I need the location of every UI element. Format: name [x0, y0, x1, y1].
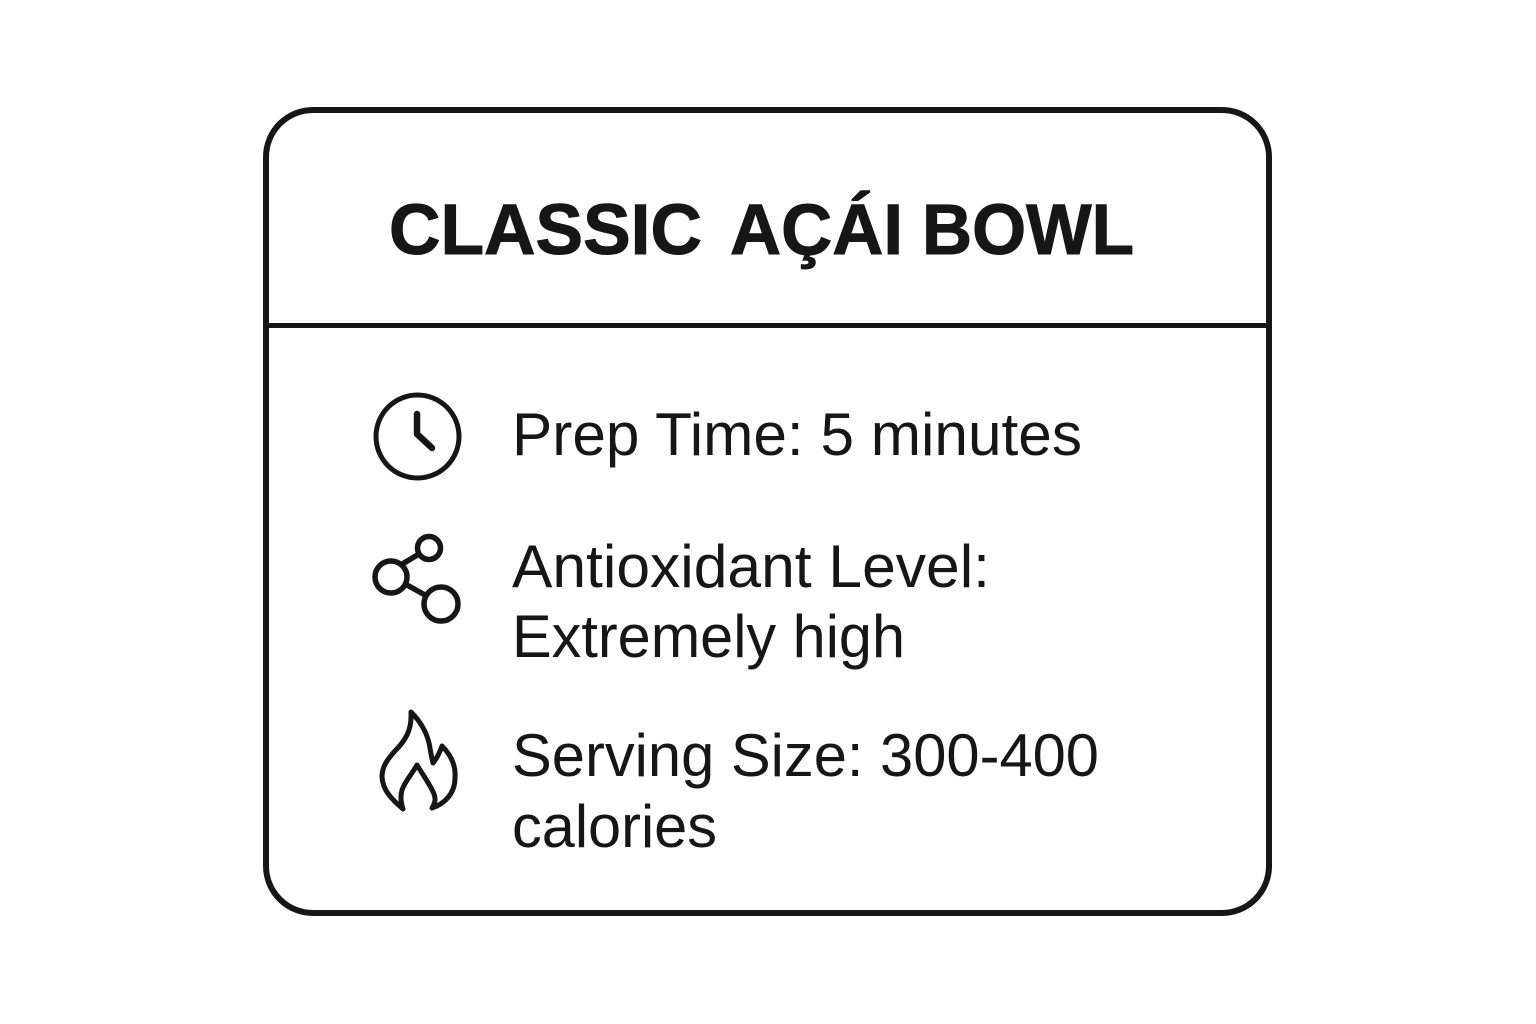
title — [389, 191, 1134, 270]
icon: clock — [376, 395, 459, 478]
text: antioxidant level — [512, 533, 990, 670]
title: CLASSIC — [389, 191, 702, 270]
text: serving size: Serving Size: 300-400 — [512, 722, 1099, 789]
text: antioxidant level: Extremely high — [512, 603, 905, 670]
icon: molecule — [375, 536, 458, 621]
panel: recipe card — [266, 110, 1269, 913]
text: serving size — [512, 722, 1099, 860]
text: serving size: calories — [512, 793, 717, 860]
title: BOWL — [922, 191, 1134, 270]
icon: flame — [382, 712, 455, 809]
text: antioxidant level: Antioxidant Level: — [512, 533, 990, 600]
title: AÇÁI — [730, 191, 903, 270]
text: prep time: Prep Time: 5 minutes — [512, 401, 1082, 468]
